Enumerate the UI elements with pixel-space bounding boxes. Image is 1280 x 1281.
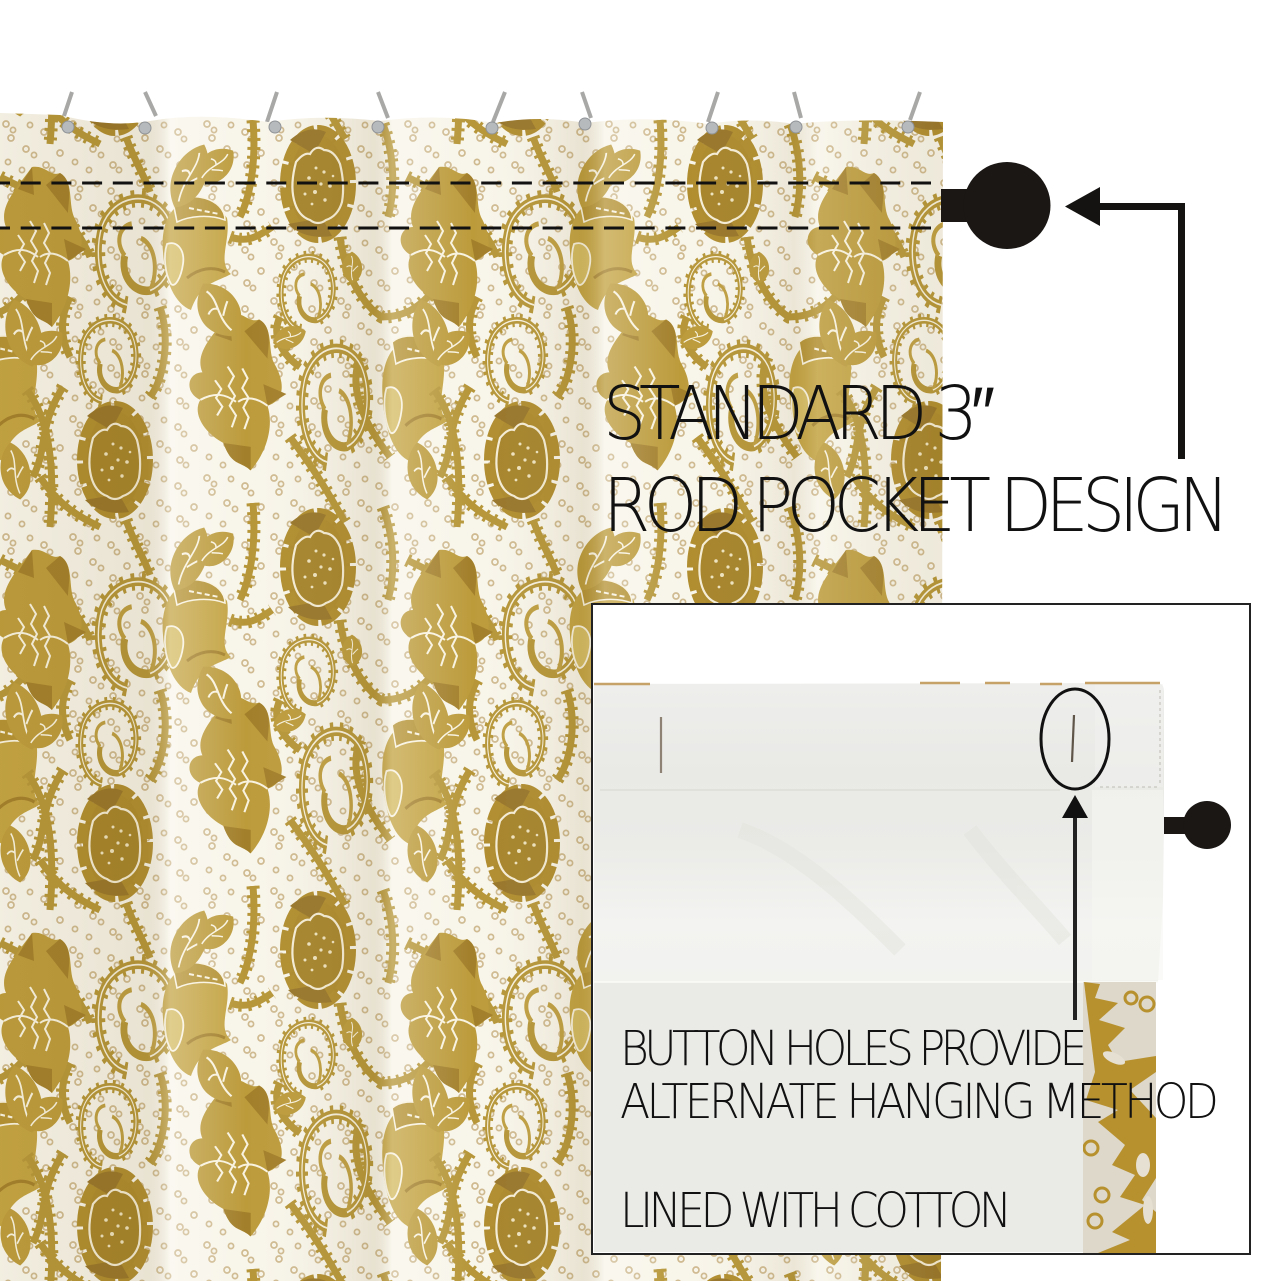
oval highlight — [1041, 689, 1109, 789]
curtain with floral print — [0, 100, 945, 1281]
callout text: button holes: BUTTON HOLES PROVIDE — [620, 1020, 1087, 1076]
arrow: rod pocket callout — [1065, 187, 1182, 459]
lining fabric — [594, 683, 1164, 1252]
callout text: button holes: ALTERNATE HANGING METHOD — [620, 1073, 1219, 1129]
curtain hanging rings — [62, 92, 920, 122]
callout text: lining: LINED WITH COTTON — [620, 1182, 1012, 1238]
panel: curtain back detail — [592, 604, 1250, 1254]
icon: small rod end — [1164, 801, 1231, 849]
callout text: standard rod pocket — [603, 370, 1230, 549]
button hole right — [1072, 715, 1074, 762]
fabric strip — [1083, 982, 1156, 1253]
arrow: to button hole — [1062, 795, 1088, 1020]
callout text: standard rod pocket: STANDARD 3″ — [603, 370, 995, 457]
icon: curtain rod end — [941, 162, 1050, 249]
rod pocket dashed lines — [0, 183, 936, 228]
ring clips — [62, 118, 914, 134]
callout text: standard rod pocket: ROD POCKET DESIGN — [603, 462, 1230, 549]
callout text: button holes — [620, 1020, 1219, 1129]
button hole left — [660, 717, 662, 773]
